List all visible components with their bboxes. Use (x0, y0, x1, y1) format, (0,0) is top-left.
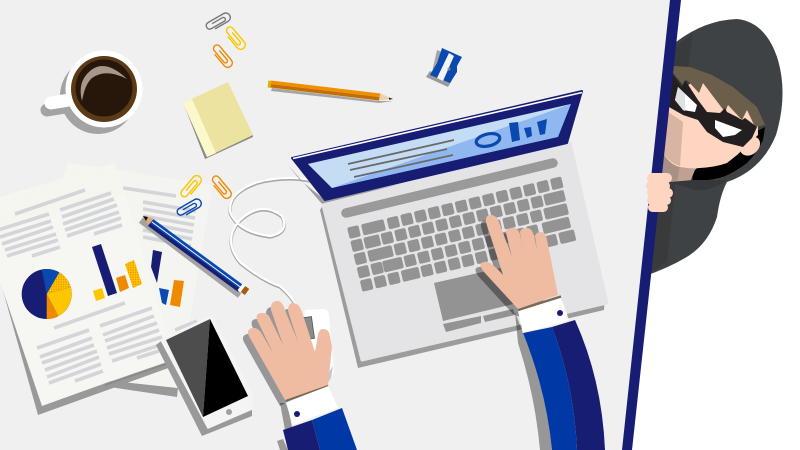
speaker bar (346, 163, 553, 213)
pie chart (22, 269, 72, 319)
laptop screen (292, 91, 582, 200)
screen bars (509, 119, 547, 142)
thief eyes (675, 87, 697, 112)
right arm and hand (476, 215, 605, 450)
right hand shadow (476, 220, 551, 317)
screen text lines (348, 140, 454, 177)
right cuff (518, 298, 569, 333)
screen donut chart (475, 131, 501, 149)
back paper (60, 163, 213, 388)
thief hand (646, 173, 673, 212)
back paper shadow (103, 380, 178, 397)
sticky note (183, 82, 253, 159)
front paper (0, 163, 175, 406)
hand shadow (243, 307, 315, 406)
laptop (288, 91, 607, 368)
keyboard (347, 176, 576, 292)
mouse cord (230, 178, 310, 309)
thief hood and body (645, 19, 783, 276)
thief (645, 19, 783, 276)
blue pencil (141, 216, 247, 295)
right hand (480, 215, 558, 309)
bar chart (92, 244, 142, 301)
cup shadow (60, 58, 136, 134)
left hand on mouse (243, 301, 357, 450)
laptop shadow (288, 150, 605, 368)
trackpad buttons (443, 316, 481, 332)
front paper text lines (0, 190, 165, 383)
thief hair (673, 66, 765, 127)
left sleeve (283, 420, 320, 450)
coffee cup (47, 50, 142, 134)
right sleeve (523, 327, 577, 450)
paperclips top (205, 11, 247, 69)
orange pencil (268, 80, 393, 103)
left cuff (286, 386, 338, 425)
cup handle (51, 99, 75, 103)
phone (156, 316, 252, 436)
mouse wheel (304, 317, 314, 339)
mouse (300, 309, 334, 384)
sharpener (426, 48, 462, 87)
cup body (66, 50, 142, 128)
right arm shadow (515, 312, 552, 450)
back paper chart (151, 250, 184, 307)
left hand (248, 301, 332, 400)
thief ear (736, 132, 764, 160)
documents (0, 163, 213, 415)
thief mask (669, 73, 757, 147)
laptop base (323, 143, 607, 360)
divider panel edge (622, 0, 681, 450)
back paper text lines (123, 188, 197, 330)
front paper shadow (0, 280, 174, 415)
trackpad (434, 268, 530, 321)
phone shadow line on paper (105, 362, 172, 385)
thief face (663, 76, 758, 168)
thief neck (660, 150, 700, 182)
thief hood interior (690, 127, 765, 181)
paperclips middle (176, 174, 233, 218)
